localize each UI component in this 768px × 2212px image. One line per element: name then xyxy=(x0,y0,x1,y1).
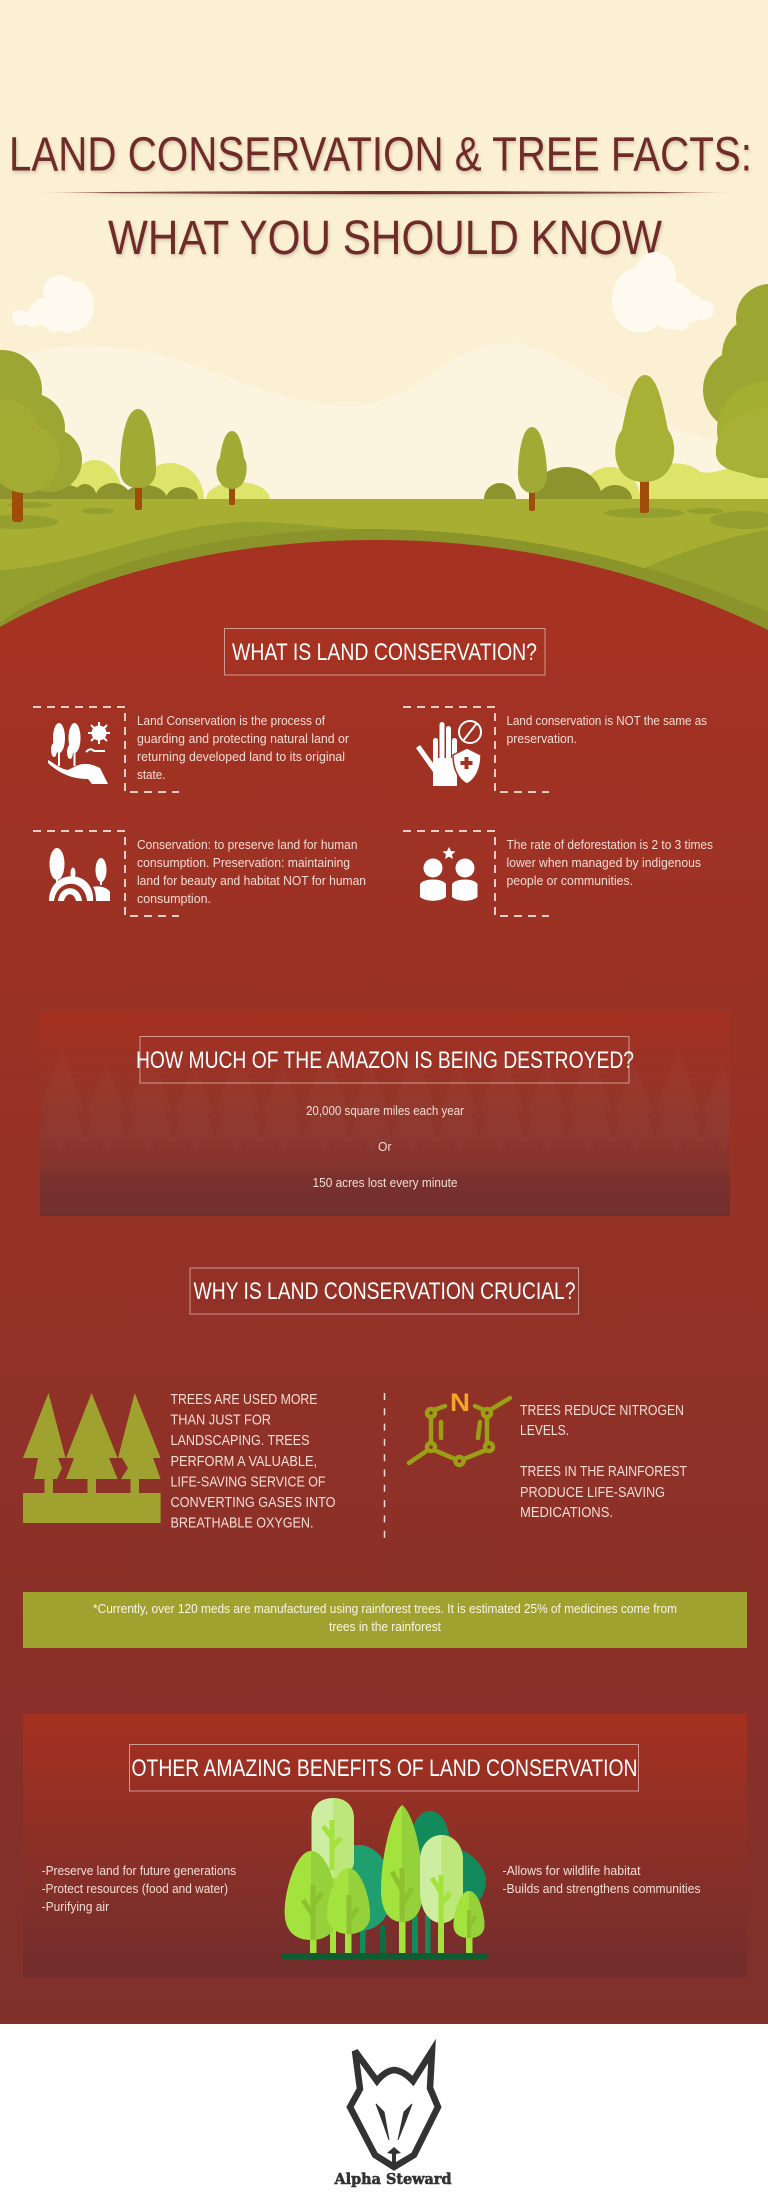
callout: rainforest medicines xyxy=(23,1592,747,1648)
text: nitrogen and medications: TREES REDUCE NITROGEN xyxy=(520,1402,684,1419)
text: nitrogen and medications: TREES IN THE RAINFOREST xyxy=(520,1463,687,1480)
tree: small 3 xyxy=(518,427,547,511)
icon: nitrogen molecule: N xyxy=(450,1389,470,1417)
distant hills xyxy=(0,343,768,499)
callout: rainforest medicines: trees in the rainforest xyxy=(329,1620,442,1634)
text: trees service: THAN JUST FOR xyxy=(170,1412,271,1429)
panel: amazon destruction xyxy=(40,1011,730,1216)
heading xyxy=(140,1036,629,1083)
sky background xyxy=(0,0,768,640)
icon: pine trees xyxy=(23,1393,161,1523)
text: The rate of deforestation is 2 to 3 times xyxy=(506,838,713,852)
icon: trees and hills xyxy=(49,848,110,901)
fact: conservation vs preservation xyxy=(33,831,366,916)
red page background xyxy=(0,530,768,2024)
fact: conservation vs preservation: consumption. xyxy=(137,892,211,906)
text: trees service: CONVERTING GASES INTO xyxy=(170,1494,336,1511)
fact: deforestation rate: lower when managed by indigenous xyxy=(506,856,701,870)
bushes: light xyxy=(67,460,768,538)
icon: nitrogen molecule xyxy=(409,1389,510,1465)
text: trees service: BREATHABLE OXYGEN. xyxy=(170,1515,314,1532)
fact: definition of land conservation: guarding and protecting natural land or xyxy=(137,732,349,746)
title: WHAT YOU SHOULD KNOW xyxy=(108,212,663,265)
icon: wolf head xyxy=(350,2051,438,2167)
text: Land conservation is NOT the same as xyxy=(506,714,707,728)
text: trees service xyxy=(170,1391,336,1532)
white footer background xyxy=(0,2024,768,2212)
text: nitrogen and medications: LEVELS. xyxy=(520,1422,569,1439)
tree: medium right xyxy=(615,375,674,513)
tree: small 1 xyxy=(120,409,156,510)
front small tree xyxy=(345,1925,352,1953)
text: trees service: TREES ARE USED MORE xyxy=(170,1391,318,1408)
panel: other benefits: -Protect resources (food and water) xyxy=(42,1882,228,1896)
text: nitrogen and medications: PRODUCE LIFE-SAVING xyxy=(520,1484,665,1501)
callout: rainforest medicines: *Currently, over 120 meds are manufactured using rainforest trees. It is estimated 25% of medicines come from xyxy=(93,1602,677,1616)
heading: why is land conservation crucial xyxy=(190,1268,578,1314)
title xyxy=(9,128,752,265)
cloud: left xyxy=(12,275,94,333)
tree: large right xyxy=(703,284,768,478)
tree: large left xyxy=(0,350,82,522)
icon: two people and star xyxy=(420,847,478,901)
panel: other benefits: -Purifying air xyxy=(42,1900,109,1914)
fact: definition of land conservation xyxy=(33,707,349,792)
left list: -Preserve land for future generations xyxy=(42,1864,236,1878)
fact: not the same as preservation xyxy=(403,707,707,792)
fact: definition of land conservation: state. xyxy=(137,768,166,782)
icon: hand, shield and prohibition sign xyxy=(416,721,481,786)
fact: not the same as preservation: preservation. xyxy=(506,732,577,746)
text: Conservation: to preserve land for human xyxy=(137,838,358,852)
dashed frame xyxy=(403,831,549,916)
right list: -Allows for wildlife habitat xyxy=(502,1864,641,1878)
wordmark: Alpha Steward xyxy=(334,2170,452,2188)
heading: why is land conservation crucial: WHY IS LAND CONSERVATION CRUCIAL? xyxy=(194,1278,576,1305)
divider xyxy=(384,1393,386,1538)
panel: amazon destruction: HOW MUCH OF THE AMAZON IS BEING DESTROYED? xyxy=(136,1047,634,1074)
tall center tree xyxy=(399,1910,406,1953)
fact: conservation vs preservation: land for beauty and habitat NOT for human xyxy=(137,874,366,888)
text: nitrogen and medications xyxy=(520,1402,687,1521)
ground xyxy=(0,499,768,660)
panel: other benefits: OTHER AMAZING BENEFITS OF LAND CONSERVATION xyxy=(132,1755,638,1782)
bushes: dark xyxy=(0,467,632,531)
fact: definition of land conservation: returning developed land to its original xyxy=(137,750,345,764)
statistics: 20,000 square miles each year xyxy=(306,1104,464,1118)
heading: what is land conservation: WHAT IS LAND CONSERVATION? xyxy=(232,639,537,666)
fact: conservation vs preservation: consumption. Preservation: maintaining xyxy=(137,856,350,870)
heading xyxy=(130,1744,638,1791)
panel: amazon destruction: 150 acres lost every minute xyxy=(312,1176,458,1190)
heading: what is land conservation xyxy=(224,628,545,675)
fact: deforestation rate xyxy=(403,831,713,916)
ground bar xyxy=(282,1953,488,1959)
icon: hand holding trees and sun xyxy=(48,722,110,784)
text: nitrogen and medications: MEDICATIONS. xyxy=(520,1504,613,1521)
text: trees service: LIFE-SAVING SERVICE OF xyxy=(170,1474,326,1490)
back trees xyxy=(409,1811,451,1855)
right small tree xyxy=(466,1930,472,1953)
dashed frame xyxy=(403,707,549,792)
tree: small 2 xyxy=(216,431,247,505)
text: trees service: LANDSCAPING. TREES xyxy=(170,1432,310,1449)
logo: alpha steward xyxy=(334,2051,452,2188)
fact: deforestation rate: people or communities. xyxy=(506,874,633,888)
dashed frame xyxy=(33,707,179,792)
left large tree xyxy=(310,1930,316,1953)
panel: amazon destruction: Or xyxy=(378,1140,392,1154)
text: trees service: PERFORM A VALUABLE, xyxy=(170,1453,317,1470)
cloud: right xyxy=(612,252,714,333)
panel: other benefits: -Builds and strengthens communities xyxy=(502,1882,700,1896)
illustration: forest xyxy=(282,1798,488,1959)
dashed frame xyxy=(33,831,179,916)
panel: other benefits xyxy=(23,1714,747,1977)
light center-right tree xyxy=(438,1915,444,1953)
text: Land Conservation is the process of xyxy=(137,714,325,728)
faint forest pattern xyxy=(40,1050,730,1150)
